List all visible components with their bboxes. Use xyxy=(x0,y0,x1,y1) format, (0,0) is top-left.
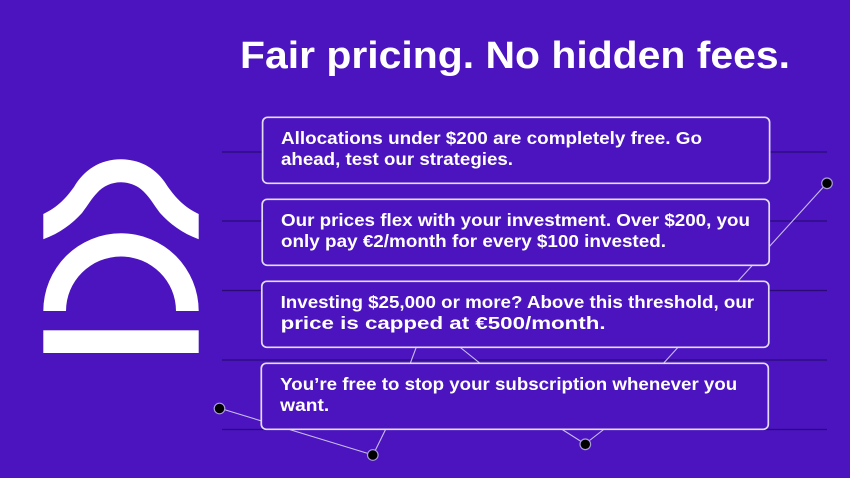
connector line chart xyxy=(219,183,827,455)
title: Fair pricing. No hidden fees. xyxy=(240,35,790,77)
panel: price cap: Investing $25,000 or more? Above this threshold, our xyxy=(281,292,754,312)
panel: cancel anytime xyxy=(261,363,768,429)
data point markers xyxy=(214,178,832,460)
panel: cancel anytime: want. xyxy=(279,395,329,415)
panel: flexible prices xyxy=(262,199,769,265)
panel: price cap: price is capped at €500/month. xyxy=(281,313,606,333)
panel: price cap xyxy=(262,281,769,347)
panel: flexible prices: Our prices flex with your investment. Over $200, you xyxy=(281,210,750,230)
logo icon xyxy=(43,159,199,353)
panel: free allocations: Allocations under $200 are completely free. Go xyxy=(281,128,702,148)
panel: free allocations: ahead, test our strategies. xyxy=(281,149,513,169)
horizontal timeline lines xyxy=(222,152,827,430)
panel: cancel anytime: You’re free to stop your subscription whenever you xyxy=(280,374,737,394)
panel: flexible prices: only pay €2/month for every $100 invested. xyxy=(281,231,666,251)
panel: free allocations xyxy=(263,117,770,183)
